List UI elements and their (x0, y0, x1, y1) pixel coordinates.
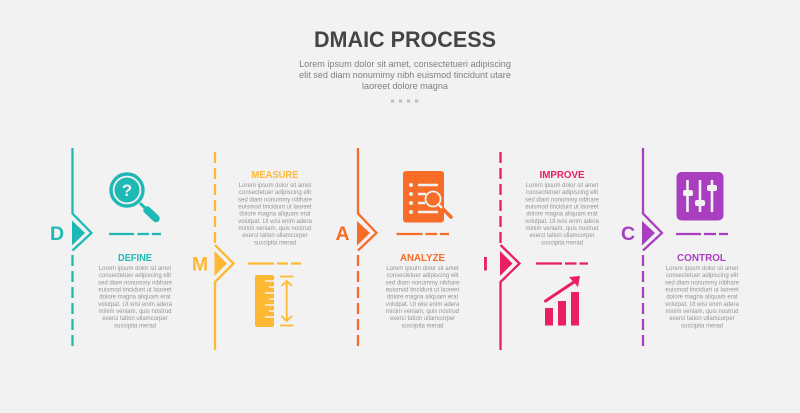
panel: analyze (335, 148, 460, 346)
text block: control: Lorem ipsum dolor sit amet (666, 266, 739, 272)
pagination dots (391, 100, 418, 103)
icon: rising bar chart (545, 276, 580, 326)
text block: measure: suscipita merad (254, 240, 296, 246)
timeline marker: A: A (335, 223, 350, 245)
panel: control (621, 148, 740, 346)
text block: improve: sed diam nonummy nibhare (525, 197, 600, 203)
text block: measure: volutpat. Ut wisi enim adera (238, 219, 313, 225)
text block: define: exerci tation ullamcorper (102, 316, 168, 322)
text block: measure (238, 183, 313, 246)
panel: measure (192, 152, 313, 350)
title: DMAIC PROCESS (314, 27, 496, 52)
text block: improve: Lorem ipsum dolor sit amet (526, 183, 599, 189)
text block: define: dolore magna aliquam erat (99, 295, 171, 301)
text block: analyze: suscipita merad (401, 323, 444, 329)
timeline marker: I (483, 152, 520, 350)
text block: improve: volutpat. Ut wisi enim adera (525, 219, 600, 225)
text block: control: dolore magna aliquam erat (666, 295, 738, 301)
text block: measure: dolore magna aliquam erat (239, 212, 311, 218)
text block: analyze: exerci tation ullamcorper (390, 316, 455, 322)
subtitle (299, 59, 511, 91)
heading: analyze: ANALYZE (400, 252, 445, 264)
text block: analyze (385, 266, 460, 329)
icon: magnifier with question mark (111, 174, 156, 218)
divider (248, 262, 301, 265)
panel: define (50, 148, 173, 346)
divider (676, 233, 728, 235)
text block: improve: exerci tation ullamcorper (529, 233, 595, 239)
text block: analyze: consectetuer adipiscing elit (386, 273, 459, 279)
text block: analyze: dolore magna aliquam erat (387, 295, 459, 301)
text block: measure: euismod tincidunt ut laoreet (238, 204, 312, 210)
panel: improve (483, 152, 600, 350)
text block: define: euismod tincidunt ut laoreet (98, 288, 172, 294)
text block: improve: consectetuer adipiscing elit (526, 190, 598, 196)
text block: analyze: Lorem ipsum dolor sit amet (386, 266, 459, 272)
text block: measure: exerci tation ullamcorper (242, 233, 308, 239)
icon: magnifier with question mark: ? (122, 181, 132, 200)
subtitle: laoreet dolore magna (362, 81, 449, 91)
timeline marker: I: I (483, 254, 488, 276)
text block: measure: Lorem ipsum dolor sit amet (239, 183, 312, 189)
text block: control: euismod tincidunt ut laoreet (665, 288, 739, 294)
text block: improve (525, 183, 600, 246)
text block: improve: minim veniam, quis nostrud (525, 226, 599, 232)
text block: define (98, 266, 173, 329)
subtitle: elit sed diam nonumimy nibh euismod tincidunt utare (299, 70, 511, 80)
icon: sliders (676, 172, 724, 220)
text block: control: exerci tation ullamcorper (669, 316, 735, 322)
text block: define: volutpat. Ut wisi enim adera (98, 302, 173, 308)
timeline marker: C (621, 148, 662, 346)
text block: control: consectetuer adipiscing elit (666, 273, 738, 279)
text block: analyze: euismod tincidunt ut laoreet (386, 288, 460, 294)
text block: control (665, 266, 740, 329)
text block: define: Lorem ipsum dolor sit amet (99, 266, 172, 272)
timeline marker: D: D (50, 223, 64, 245)
heading: improve: IMPROVE (540, 169, 584, 181)
heading: measure: MEASURE (252, 169, 298, 181)
text block: improve: euismod tincidunt ut laoreet (525, 204, 599, 210)
header (299, 27, 511, 103)
text block: analyze: sed diam nonummy nibhare (385, 280, 460, 286)
text block: measure: sed diam nonummy nibhare (238, 197, 313, 203)
text block: improve: suscipita merad (541, 240, 583, 246)
text block: control: suscipita merad (681, 323, 723, 329)
text block: analyze: minim veniam, quis nostrud (386, 309, 459, 315)
text block: control: volutpat. Ut wisi enim adera (665, 302, 740, 308)
timeline marker: C: C (621, 223, 635, 245)
icon: ruler with height arrow (255, 275, 294, 327)
icon: document with magnifier (403, 171, 451, 222)
timeline marker: D (50, 148, 92, 346)
text block: define: minim veniam, quis nostrud (98, 309, 172, 315)
timeline marker: M (192, 152, 234, 350)
text block: improve: dolore magna aliquam erat (526, 212, 598, 218)
subtitle: Lorem ipsum dolor sit amet, consectetueri adipiscing (299, 59, 511, 69)
text block: measure: consectetuer adipiscing elit (239, 190, 311, 196)
text block: define: sed diam nonummy nibhare (98, 280, 173, 286)
divider (536, 262, 588, 265)
text block: measure: minim veniam, quis nostrud (238, 226, 312, 232)
divider (109, 233, 161, 235)
text block: control: sed diam nonummy nibhare (665, 280, 740, 286)
text block: define: consectetuer adipiscing elit (99, 273, 171, 279)
heading: define: DEFINE (118, 252, 152, 264)
text block: control: minim veniam, quis nostrud (665, 309, 739, 315)
timeline marker: A (335, 148, 376, 346)
heading: control: CONTROL (677, 252, 727, 264)
text block: define: suscipita merad (114, 323, 156, 329)
timeline marker: M: M (192, 254, 208, 276)
divider (396, 233, 449, 235)
text block: analyze: volutpat. Ut wisi enim adera (386, 302, 460, 308)
